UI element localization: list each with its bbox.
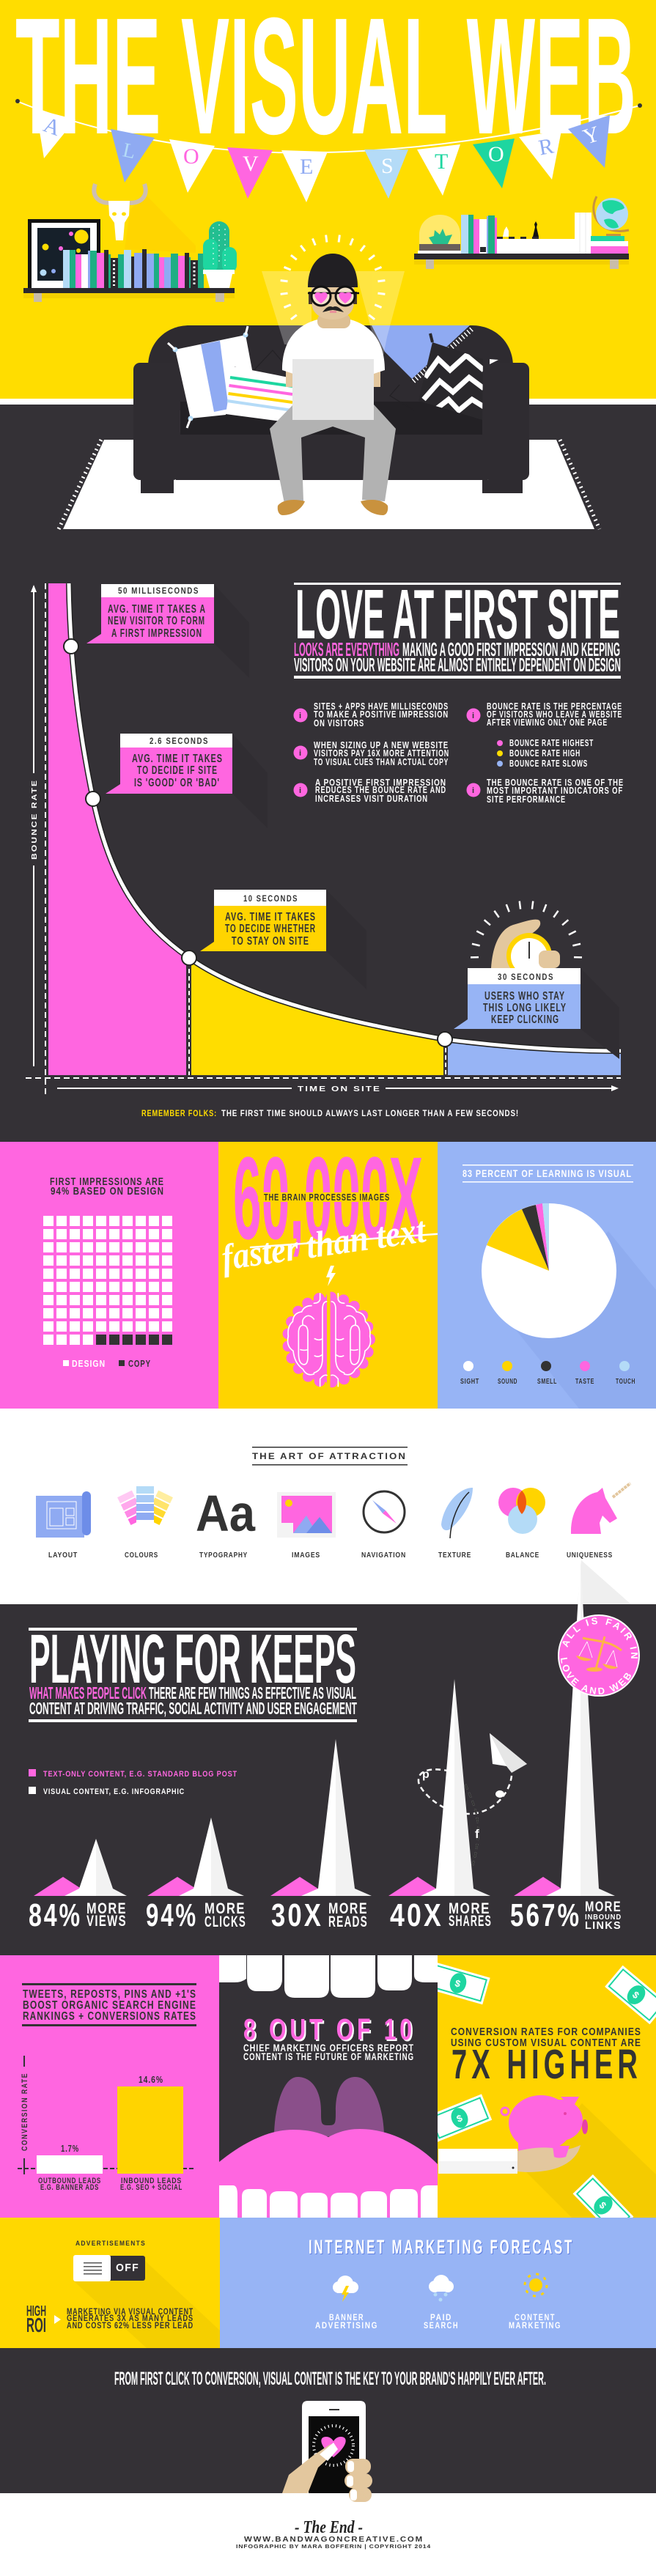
section: playing for keeps — [0, 1565, 656, 1955]
money bills — [426, 1962, 656, 2236]
left blue striped pillow — [168, 326, 253, 428]
toggle switch: off: OFF — [116, 2262, 139, 2274]
bunting: a love story: O — [183, 144, 199, 169]
callout: 10 seconds — [200, 890, 366, 989]
callout: 50 milliseconds: 50 MILLISECONDS — [118, 587, 199, 596]
icon: lightning cloud — [333, 2276, 358, 2302]
icon: balance circles — [498, 1488, 545, 1534]
globe — [594, 196, 629, 236]
section: love at first site — [26, 575, 624, 1118]
info list: first impressions: SITES + APPS HAVE MILLISECONDS — [314, 701, 449, 712]
cactus in pot — [203, 221, 237, 288]
bar chart — [18, 2056, 196, 2192]
sofa — [133, 325, 529, 493]
panel: conversion rate chart: BOOST ORGANIC SEARCH ENGINE — [23, 1999, 196, 2012]
piggy bank in hand — [438, 2095, 588, 2174]
y axis label: BOUNCE RATE — [31, 779, 39, 860]
spike: 84% — [34, 1839, 127, 1896]
info list: first impressions: TO MAKE A POSITIVE IMPRESSION — [314, 709, 449, 720]
paper plane — [490, 1733, 527, 1773]
label: paid search — [424, 2312, 459, 2330]
terrarium — [418, 215, 463, 254]
trousers — [270, 405, 396, 503]
panel: conversion rate chart: RANKINGS + CONVERSIONS RATES — [23, 2010, 196, 2023]
callout: 10 seconds: TO DECIDE WHETHER — [225, 923, 316, 935]
icon: pinterest: p — [422, 1768, 430, 1781]
waffle legend: COPY — [128, 1358, 151, 1369]
left shelf with frame, skull, books and cactus — [23, 184, 237, 302]
laptop — [292, 359, 374, 420]
row of books — [63, 249, 204, 288]
stat: 30x more reads: READS — [328, 1913, 368, 1930]
pie legend: SIGHT — [460, 1377, 479, 1386]
info list: bounce rate: BOUNCE RATE HIGH — [509, 748, 581, 759]
info list: first impressions: REDUCES THE BOUNCE RATE AND — [315, 785, 446, 795]
stripy pillow — [226, 366, 292, 423]
halo rays — [281, 235, 385, 320]
high roi: MARKETING VIA VISUAL CONTENT — [67, 2306, 194, 2317]
brain — [287, 1292, 370, 1388]
callout: 50 milliseconds: AVG. TIME IT TAKES A — [108, 603, 206, 616]
uvula — [274, 2077, 384, 2136]
stat: 40x more shares — [390, 1897, 492, 1933]
bunting: a love story: T — [435, 150, 448, 174]
upper teeth — [219, 1955, 438, 1998]
section: playing for keeps: THERE ARE FEW THINGS AS EFFECTIVE AS VISUAL — [149, 1683, 356, 1702]
label: typography: TYPOGRAPHY — [199, 1551, 248, 1560]
stat: 567% more inbound links: INBOUND — [585, 1913, 622, 1922]
info list: first impressions: INCREASES VISIT DURATION — [315, 794, 428, 804]
high roi: GENERATES 3X AS MANY LEADS — [67, 2313, 194, 2323]
info list: bounce rate — [466, 701, 624, 805]
panel: 8 out of 10 mouth — [219, 1955, 438, 2218]
pie legend: TASTE — [575, 1377, 594, 1386]
bull skull — [94, 184, 146, 240]
icon: texture feather — [441, 1488, 473, 1538]
callout: 30 seconds: 30 SECONDS — [498, 973, 554, 982]
info list: first impressions: VISITORS PAY 16X MORE ATTENTION — [314, 748, 449, 759]
spike: 567% — [514, 1560, 615, 1896]
waffle legend — [63, 1358, 151, 1369]
bunting: a love story: A — [40, 113, 64, 141]
callout: 30 seconds — [454, 968, 619, 1059]
label: content marketing — [509, 2312, 561, 2330]
stat: 567% more inbound links: MORE — [585, 1900, 622, 1915]
pie legend: TOUCH — [616, 1377, 635, 1386]
lightning bolt — [326, 1266, 336, 1286]
label: banner advertising — [315, 2312, 378, 2330]
toggle switch: off — [73, 2255, 145, 2281]
heart glasses — [308, 287, 359, 306]
stat: 30x more reads — [271, 1897, 368, 1933]
callout: 30 seconds: KEEP CLICKING — [491, 1014, 559, 1026]
high roi: HIGH — [26, 2303, 46, 2319]
footnote: remember folks: THE FIRST TIME SHOULD ALWAYS LAST LONGER THAN A FEW SECONDS! — [221, 1108, 519, 1118]
callout: 2.6 seconds: AVG. TIME IT TAKES — [132, 753, 223, 765]
bar chart: CONVERSION RATE — [21, 2073, 29, 2151]
label: layout: LAYOUT — [48, 1551, 78, 1560]
high roi: AND COSTS 62% LESS PER LEAD — [67, 2320, 194, 2330]
bar chart: INBOUND LEADS — [121, 2177, 182, 2185]
headline: 8 OUT OF 10 — [245, 2014, 417, 2048]
bunting: a love story — [15, 99, 642, 202]
footer credits: - The End - — [295, 2518, 363, 2537]
badge: all is fair in love and web: LOVE AND WEB — [560, 1658, 631, 1694]
icon: rain cloud — [429, 2275, 454, 2301]
tongue — [219, 2129, 438, 2218]
laptop light beams — [262, 271, 405, 366]
panel: 7x higher — [438, 1955, 656, 2218]
heading: love at first site: LOOKS ARE EVERYTHING — [294, 638, 399, 660]
stat: 567% more inbound links: LINKS — [585, 1919, 622, 1932]
pie legend: SMELL — [537, 1377, 557, 1386]
waffle legend: DESIGN — [72, 1358, 106, 1369]
x axis label — [57, 1085, 619, 1093]
footer credits: WWW.BANDWAGONCREATIVE.COM — [244, 2536, 424, 2544]
label: paid search: PAID — [430, 2312, 452, 2322]
icon: colours — [117, 1486, 174, 1540]
legend — [29, 1769, 237, 1796]
info list: bounce rate: SITE PERFORMANCE — [487, 794, 566, 805]
bar chart: E.G. BANNER ADS — [40, 2183, 99, 2192]
panel: 60,000x faster than text: THE BRAIN PROCESSES IMAGES — [264, 1192, 390, 1203]
label: images: IMAGES — [292, 1551, 320, 1560]
script tagline: faster than text — [219, 1208, 430, 1278]
footer credits — [236, 2518, 431, 2550]
stacked books — [591, 236, 628, 254]
stat: 84% more views: VIEWS — [86, 1913, 127, 1930]
callout: 30 seconds: THIS LONG LIKELY — [483, 1002, 567, 1014]
label: paid search: SEARCH — [424, 2320, 459, 2330]
money bills: $ — [630, 1989, 642, 2001]
stat: 84% more views: 84% — [29, 1897, 82, 1933]
bar chart: 1.7% — [61, 2143, 79, 2154]
tall white books — [575, 213, 591, 254]
icon: typography: Aa — [196, 1485, 256, 1542]
money bills: $ — [597, 2199, 609, 2211]
high roi: ROI — [26, 2314, 46, 2336]
bounce rate chart — [26, 583, 621, 1097]
high roi — [26, 2303, 194, 2336]
label: balance: BALANCE — [506, 1551, 539, 1560]
man on sofa with heart glasses — [270, 235, 396, 515]
hero section: the visual web — [0, 0, 656, 1142]
legend: TEXT-ONLY CONTENT, E.G. STANDARD BLOG POST — [43, 1770, 237, 1779]
footer credits: INFOGRAPHIC BY MARA BOFFERIN | COPYRIGHT 2014 — [236, 2543, 431, 2550]
framed solar system poster — [28, 219, 100, 288]
label: texture: TEXTURE — [438, 1551, 471, 1560]
panel: 94% based on design — [0, 1142, 218, 1409]
section: the art of attraction — [0, 1409, 656, 1605]
callout: 2.6 seconds: IS 'GOOD' OR 'BAD' — [134, 777, 220, 789]
headline — [243, 2012, 417, 2062]
info list: bounce rate: i — [472, 786, 475, 795]
info list: first impressions — [293, 701, 449, 804]
info list: first impressions: i — [299, 749, 302, 758]
panel: 94% based on design: 94% BASED ON DESIGN — [51, 1185, 164, 1197]
callout: 10 seconds: AVG. TIME IT TAKES — [225, 911, 316, 923]
panel: conversion rate chart — [0, 1955, 219, 2218]
heading: CONTENT AT DRIVING TRAFFIC, SOCIAL ACTIVITY AND USER ENGAGEMENT — [29, 1699, 357, 1718]
lower teeth — [219, 2185, 438, 2218]
icon: images — [277, 1492, 336, 1538]
footnote: remember folks: REMEMBER FOLKS: — [141, 1108, 217, 1118]
bunting: a love story: V — [243, 152, 259, 176]
chess board with pieces — [497, 221, 575, 254]
panel: 83 percent of learning is visual — [438, 1142, 656, 1409]
badge: all is fair in love and web: ALL IS FAIR IN — [562, 1617, 638, 1658]
money bills: $ — [455, 2112, 465, 2125]
waffle chart — [43, 1216, 172, 1345]
bunting: a love story: R — [537, 134, 556, 160]
dashed paper plane trail with social icons — [419, 1769, 512, 1865]
money bills: $ — [454, 1977, 462, 1990]
dashed loop over spike — [465, 1785, 478, 1865]
icon: sun — [525, 2274, 547, 2296]
bar chart: E.G. SEO + SOCIAL — [120, 2183, 183, 2192]
stat: 94% more clicks: MORE — [204, 1900, 246, 1917]
bunting: a love story: E — [300, 155, 313, 179]
info list: first impressions: TO VISUAL CUES THAN ACTUAL COPY — [314, 757, 449, 767]
info list: bounce rate: BOUNCE RATE SLOWS — [509, 759, 588, 769]
icon: navigation compass — [364, 1491, 405, 1532]
bunting: a love story: S — [381, 154, 394, 178]
label: content marketing: MARKETING — [509, 2320, 561, 2330]
info list: first impressions: A POSITIVE FIRST IMPRESSION — [315, 778, 446, 788]
info list: bounce rate: i — [472, 712, 475, 720]
icon: facebook: f — [475, 1827, 479, 1841]
badge: all is fair in love and web — [558, 1614, 640, 1697]
panel: 94% based on design: FIRST IMPRESSIONS ARE — [50, 1176, 164, 1188]
bunting: a love story: Y — [580, 122, 602, 150]
stat: 84% more views: MORE — [86, 1900, 127, 1917]
bunting: a love story: L — [121, 139, 138, 163]
y axis label — [31, 585, 39, 1066]
stat: 30x more reads: MORE — [328, 1900, 368, 1917]
info list: first impressions: WHEN SIZING UP A NEW WEBSITE — [314, 740, 449, 750]
icon: twitter bird — [495, 1790, 504, 1798]
label: navigation: NAVIGATION — [361, 1551, 406, 1560]
stat: 30x more reads: 30X — [271, 1897, 323, 1933]
callout: 10 seconds: TO STAY ON SITE — [232, 935, 309, 948]
spike: 94% — [147, 1817, 244, 1896]
label: colours: COLOURS — [125, 1551, 158, 1560]
stat: 94% more clicks: CLICKS — [204, 1913, 246, 1930]
label: banner advertising: BANNER — [329, 2312, 364, 2322]
headline: CONTENT IS THE FUTURE OF MARKETING — [243, 2051, 414, 2062]
panel: advertisements and high roi — [0, 2218, 220, 2348]
bar chart: 14.6% — [139, 2074, 163, 2085]
callout: 2.6 seconds — [106, 734, 268, 828]
stat: 567% more inbound links: 567% — [510, 1897, 581, 1933]
section: closing statement — [0, 2348, 656, 2493]
info list: first impressions: i — [299, 786, 302, 795]
x axis label: TIME ON SITE — [298, 1085, 381, 1093]
callout: 50 milliseconds: NEW VISITOR TO FORM — [108, 615, 205, 627]
label: banner advertising: ADVERTISING — [315, 2320, 378, 2330]
pie legend — [460, 1361, 635, 1386]
panel: 60,000x faster than text — [218, 1132, 466, 1409]
callout: 30 seconds: USERS WHO STAY — [484, 990, 565, 1003]
heading — [29, 1620, 357, 1722]
pie legend: SOUND — [498, 1377, 517, 1386]
callout: 50 milliseconds: A FIRST IMPRESSION — [111, 627, 202, 640]
footnote: remember folks — [141, 1108, 519, 1118]
zigzag pillow — [421, 333, 498, 413]
callout: 2.6 seconds: TO DECIDE IF SITE — [137, 764, 218, 777]
senses pie chart — [482, 1203, 616, 1338]
bar chart: OUTBOUND LEADS — [38, 2177, 101, 2185]
icon: uniqueness unicorn — [571, 1483, 630, 1534]
footer credits background — [0, 2493, 656, 2576]
bunting: a love story: O — [488, 142, 504, 166]
callout: 2.6 seconds: 2.6 SECONDS — [150, 737, 209, 746]
icon: hand holding phone with heart — [282, 2401, 372, 2502]
heading: THE ART OF ATTRACTION — [252, 1451, 407, 1461]
panel: advertisements and high roi: ADVERTISEMENTS — [75, 2240, 146, 2247]
spike: 30x — [270, 1739, 372, 1896]
info list: bounce rate: BOUNCE RATE HIGHEST — [509, 738, 594, 748]
spike: 40x — [388, 1679, 490, 1896]
panel: internet marketing forecast — [220, 2218, 656, 2348]
stat: 40x more shares: SHARES — [449, 1913, 492, 1930]
icon: layout — [36, 1491, 91, 1538]
stat: 94% more clicks: 94% — [146, 1897, 198, 1933]
books — [461, 215, 497, 254]
callout: 50 milliseconds — [86, 584, 249, 678]
stat: 40x more shares: 40X — [390, 1897, 443, 1933]
info list: bounce rate: AFTER VIEWING ONLY ONE PAGE — [487, 717, 608, 728]
legend: VISUAL CONTENT, E.G. INFOGRAPHIC — [43, 1787, 185, 1796]
label: content marketing: CONTENT — [515, 2312, 556, 2322]
right shelf with terrarium, books, chess set and globe — [414, 196, 629, 269]
blue throw blanket — [372, 325, 473, 381]
label: uniqueness: UNIQUENESS — [567, 1551, 613, 1560]
stopwatch in hand — [471, 901, 582, 978]
headline: CHIEF MARKETING OFFICERS REPORT — [243, 2042, 414, 2053]
panel: conversion rate chart: TWEETS, REPOSTS, PINS AND +1'S — [23, 1988, 196, 2001]
callout: 10 seconds: 10 SECONDS — [243, 895, 298, 904]
info list: first impressions: ON VISITORS — [314, 718, 364, 728]
heading: WHAT MAKES PEOPLE CLICK — [29, 1683, 147, 1702]
scales icon — [576, 1636, 622, 1672]
stat: 40x more shares: MORE — [449, 1900, 490, 1917]
heading: love at first site — [294, 575, 621, 679]
rug — [59, 440, 600, 529]
headline: 8 OUT OF 10 — [243, 2012, 416, 2046]
info list: first impressions: i — [299, 712, 302, 720]
